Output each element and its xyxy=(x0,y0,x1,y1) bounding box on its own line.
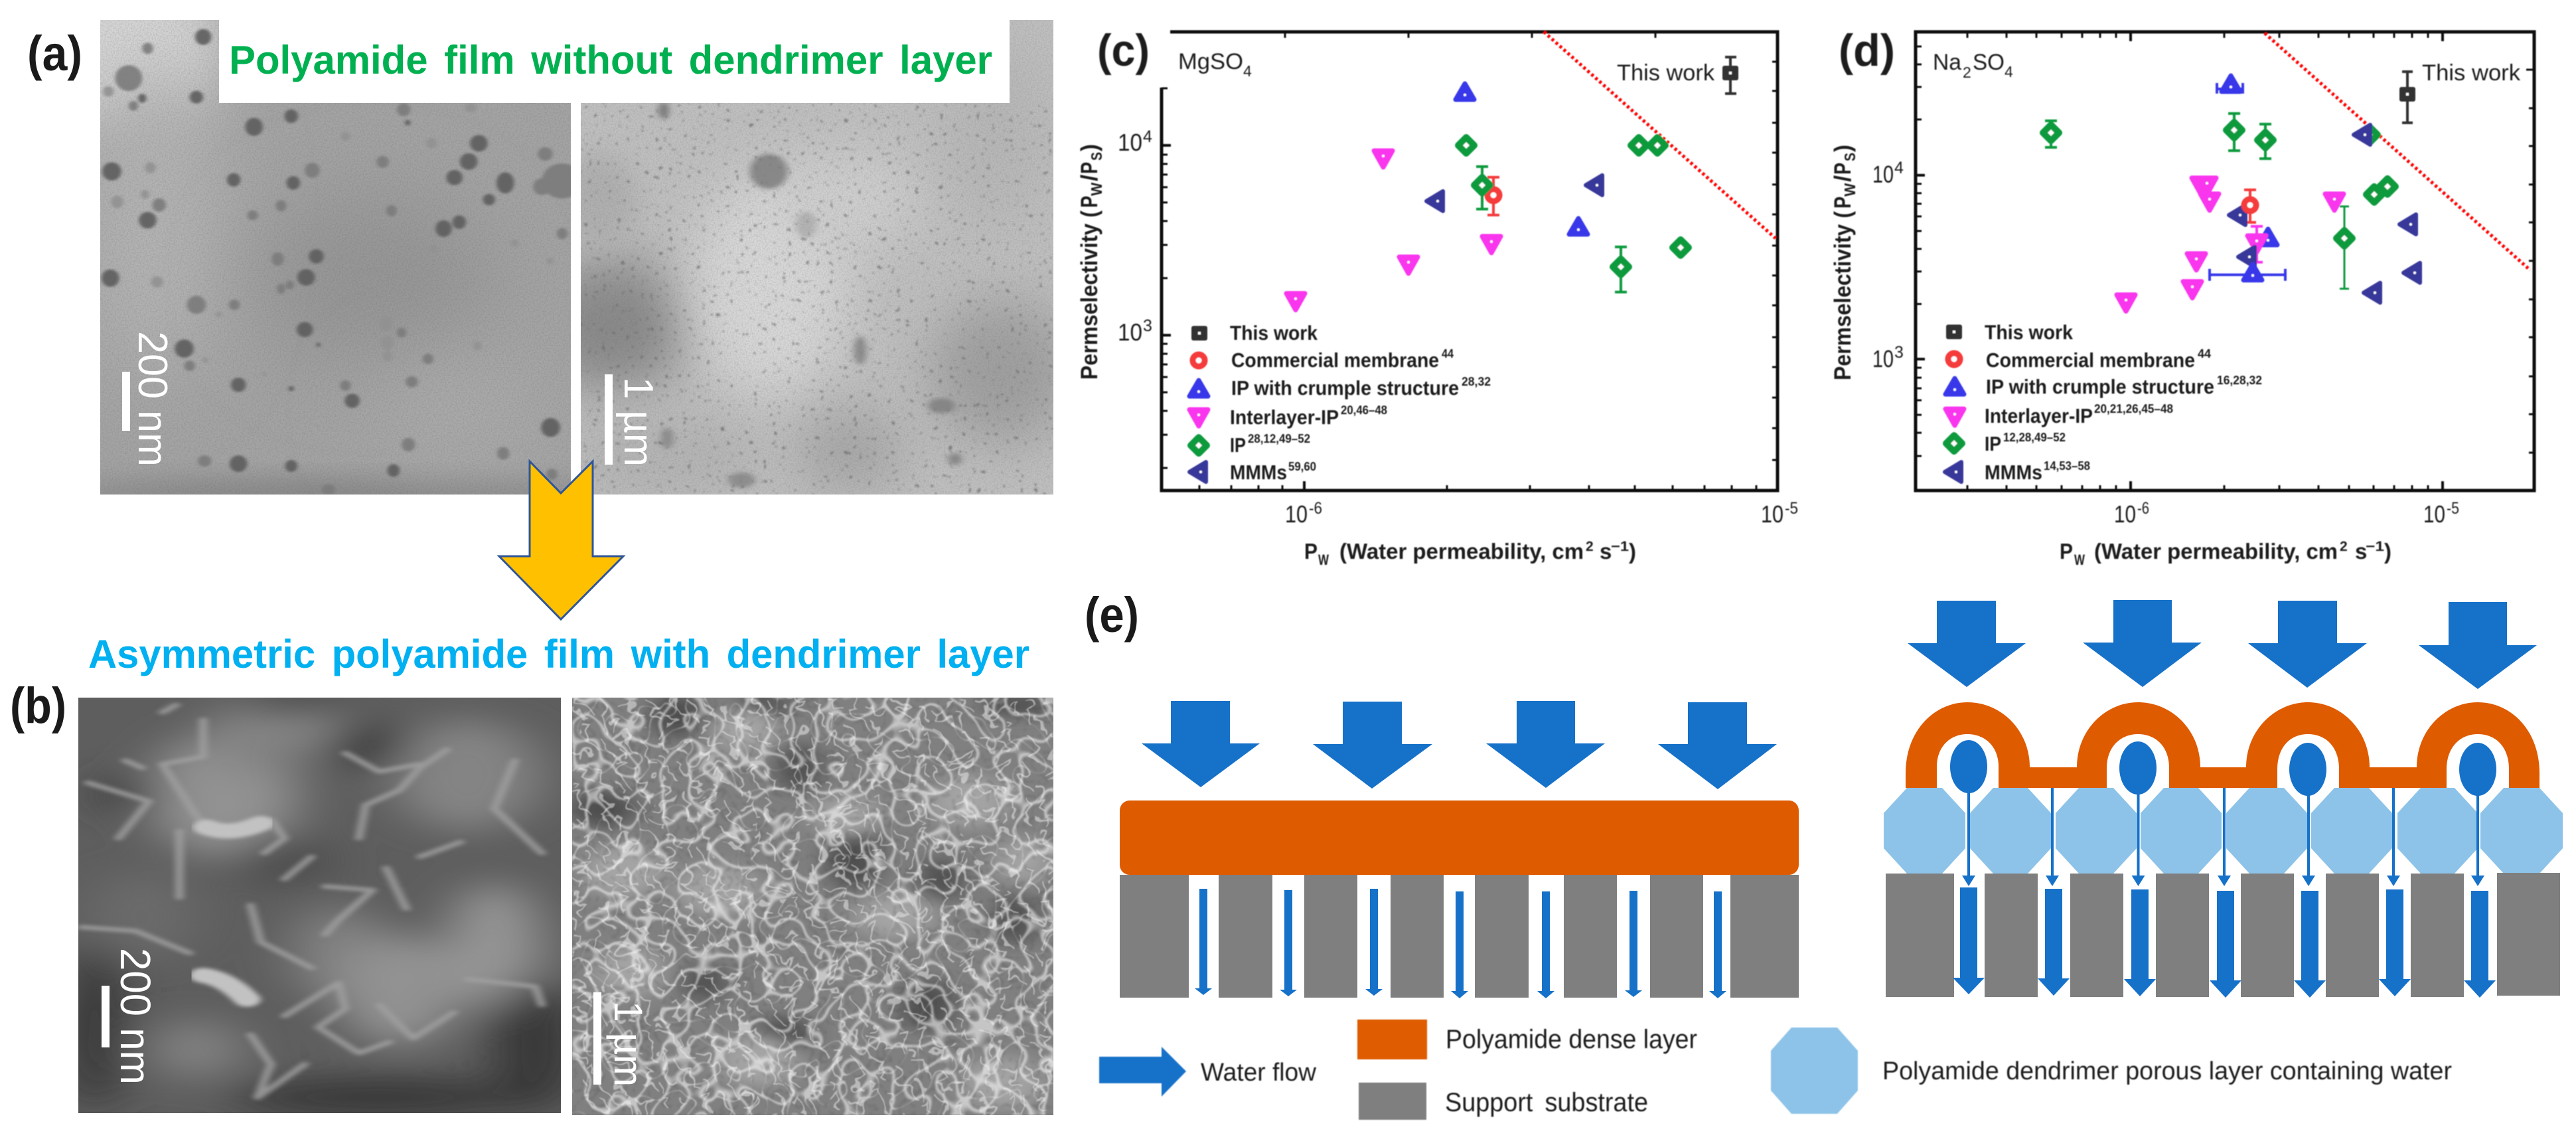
panel label (b): (b) xyxy=(10,678,66,734)
support substrate blocks xyxy=(1120,875,1799,998)
y-axis title d: P xyxy=(1830,163,1856,175)
x-axis tick labels c xyxy=(1285,499,1798,528)
salt label Na2SO4: Na xyxy=(1933,50,1961,75)
legend d: IP xyxy=(1985,432,2001,455)
dendrimer porous layer octagons xyxy=(1884,788,2563,874)
y-axis tick labels c: 10 xyxy=(1118,319,1142,346)
y-axis title d: ) xyxy=(1830,145,1856,152)
y-axis title d: P xyxy=(1830,196,1856,208)
legend item: support substrate: Support substrate xyxy=(1445,1088,1648,1117)
x-axis title c: ) xyxy=(1629,539,1636,564)
x-axis title d: 2 xyxy=(2340,539,2348,554)
water droplets under humps xyxy=(1950,740,2496,796)
panel c: MgSO4 chart xyxy=(1077,25,1798,568)
legend d xyxy=(1945,321,2262,484)
scale bar a right: 1 um: 1 µm xyxy=(615,377,661,467)
feed water arrows right xyxy=(1908,600,2537,689)
panel d: Na2SO4 chart xyxy=(1830,25,2534,568)
panel label (c): (c) xyxy=(1097,25,1150,76)
permeate arrows in pores xyxy=(1195,889,1726,998)
arrow: yellow transition arrow from a to b xyxy=(499,461,623,619)
y-axis title c: / xyxy=(1077,175,1102,181)
legend c: 44 xyxy=(1442,347,1454,360)
error bars d xyxy=(2045,72,2413,289)
panel b title: Asymmetric polyamide film with dendrimer layer xyxy=(88,632,1029,676)
panel label (d): (d) xyxy=(1839,25,1895,76)
legend d: This work xyxy=(1985,321,2074,344)
x-axis title c: s xyxy=(1600,539,1612,564)
scale bar b left: 200 nm: 200 nm xyxy=(112,948,159,1085)
legend c: 20,46–48 xyxy=(1341,404,1387,417)
legend e xyxy=(1099,1020,2452,1120)
legend c: 59,60 xyxy=(1288,460,1316,473)
y-axis tick labels d: 4 xyxy=(1894,159,1904,177)
legend item: polyamide dendrimer porous layer xyxy=(1771,1028,2452,1114)
y-axis title d: W xyxy=(1841,183,1858,196)
legend item: polyamide dense layer xyxy=(1357,1020,1697,1059)
y-axis title d: Permselectivity ( xyxy=(1830,211,1856,380)
x-axis title d: s xyxy=(2355,539,2367,564)
red dotted upper bound line d xyxy=(2265,33,2530,270)
y-axis title c: S xyxy=(1088,152,1105,161)
scale bar b right: 1 um xyxy=(593,992,650,1087)
salt label MgSO4: 4 xyxy=(1243,62,1252,80)
banner: polyamide film without dendrimer layer xyxy=(219,0,1010,495)
salt label Na2SO4: 2 xyxy=(1963,64,1971,81)
legend item: polyamide dense layer: Polyamide dense layer xyxy=(1446,1025,1697,1054)
x-axis tick labels d: -5 xyxy=(2447,499,2459,518)
data points d xyxy=(2043,76,2420,311)
y-axis tick labels c: 3 xyxy=(1143,317,1152,335)
y-axis tick labels d xyxy=(1872,159,1904,372)
x-axis tick labels d: 10 xyxy=(2423,500,2445,528)
y-axis tick labels c: 4 xyxy=(1143,127,1152,146)
salt label Na2SO4: 4 xyxy=(2005,63,2013,80)
x-axis title c: −1 xyxy=(1611,539,1629,554)
legend c: IP xyxy=(1230,433,1246,457)
x-axis title d: −1 xyxy=(2366,539,2384,554)
red dotted upper bound line c xyxy=(1544,32,1776,238)
x-axis tick labels d: -6 xyxy=(2137,499,2149,518)
legend d: 16,28,32 xyxy=(2217,374,2262,387)
y-axis title c: Permselectivity ( xyxy=(1077,210,1102,380)
polyamide crumpled dense layer xyxy=(1906,702,2539,788)
legend item: polyamide dendrimer porous layer: Polyamide dendrimer porous layer containing water xyxy=(1882,1057,2452,1085)
data points c xyxy=(1286,66,1738,310)
panel label (e): (e) xyxy=(1085,587,1139,643)
x-axis title d xyxy=(2060,539,2391,568)
y-axis tick labels d: 10 xyxy=(1872,161,1894,188)
salt label Na2SO4: SO xyxy=(1973,50,2005,75)
legend d: 12,28,49–52 xyxy=(2003,431,2066,444)
x-axis tick labels c: -6 xyxy=(1309,499,1322,518)
y-axis tick labels d: 3 xyxy=(1894,343,1904,362)
axes frame d xyxy=(1916,32,2534,491)
feed water arrows left xyxy=(1142,701,1777,789)
x-axis title c: 2 xyxy=(1586,539,1594,554)
panel label (a): (a) xyxy=(27,26,82,81)
legend item: support substrate xyxy=(1359,1083,1648,1120)
panel a: right TEM micrograph xyxy=(581,20,1053,495)
x-axis tick labels c: -5 xyxy=(1785,499,1798,518)
x-axis tick labels c: 10 xyxy=(1761,500,1783,528)
x-axis tick labels d: 10 xyxy=(2114,500,2136,528)
x-axis title d: (Water permeability, cm xyxy=(2094,539,2338,564)
thick permeate arrows right xyxy=(1953,887,2496,998)
error bars c xyxy=(1476,57,1736,292)
annotation this work c: This work xyxy=(1617,60,1715,86)
salt label Na2SO4 xyxy=(1933,50,2013,81)
legend d: Interlayer-IP xyxy=(1985,404,2093,427)
support substrate blocks right xyxy=(1886,873,2560,997)
panel e: membrane without dendrimer layer xyxy=(1120,701,1799,998)
x-axis title d: P xyxy=(2060,539,2073,564)
x-axis tick labels d xyxy=(2114,499,2459,528)
y-axis tick labels c: 10 xyxy=(1118,129,1142,156)
legend d: Commercial membrane xyxy=(1986,348,2195,372)
legend c: This work xyxy=(1230,321,1318,344)
legend d: IP with crumple structure xyxy=(1986,375,2214,398)
y-axis title c: ) xyxy=(1077,144,1102,151)
panel a: left TEM micrograph xyxy=(100,20,571,495)
legend d: 14,53–58 xyxy=(2044,459,2090,473)
legend d: 20,21,26,45–48 xyxy=(2094,402,2173,416)
legend c xyxy=(1189,321,1491,484)
y-axis title d: S xyxy=(1841,153,1858,161)
x-axis title c: W xyxy=(1318,552,1329,568)
y-axis title c: P xyxy=(1077,196,1102,208)
legend d: 44 xyxy=(2198,347,2211,360)
x-axis tick labels c: 10 xyxy=(1285,500,1308,528)
scale bar a left: 200 nm: 200 nm xyxy=(129,331,175,467)
y-axis title c: P xyxy=(1077,162,1102,174)
y-axis tick labels c xyxy=(1118,127,1152,346)
polyamide dense layer xyxy=(1120,801,1799,875)
salt label MgSO4: MgSO xyxy=(1178,49,1243,74)
annotation this work d: This work xyxy=(2422,60,2521,86)
legend d: MMMs xyxy=(1985,461,2042,484)
x-axis title c: (Water permeability, cm xyxy=(1339,539,1584,564)
legend c: IP with crumple structure xyxy=(1231,376,1459,400)
banner: polyamide film without dendrimer layer: Polyamide film without dendrimer layer xyxy=(229,38,992,82)
legend c: 28,32 xyxy=(1462,375,1491,388)
y-axis tick labels d: 10 xyxy=(1872,345,1894,372)
legend item: water flow: Water flow xyxy=(1201,1059,1317,1087)
y-axis title c: W xyxy=(1088,183,1105,196)
legend c: MMMs xyxy=(1230,461,1287,484)
legend item: water flow xyxy=(1099,1047,1317,1097)
x-axis title c xyxy=(1304,539,1636,568)
scale bar b right: 1 um: 1 µm xyxy=(606,1001,650,1087)
legend c: Commercial membrane xyxy=(1231,348,1439,372)
x-axis title d: ) xyxy=(2384,539,2391,564)
panel e: membrane with dendrimer layer xyxy=(1884,600,2563,998)
panel b: left SEM micrograph xyxy=(68,694,575,1116)
x-axis title d: W xyxy=(2074,552,2085,568)
y-axis title d: / xyxy=(1830,175,1856,182)
thin flow arrows through dendrimer layer xyxy=(1962,788,2484,886)
x-axis title c: P xyxy=(1304,539,1318,564)
legend c: 28,12,49–52 xyxy=(1248,432,1310,445)
legend c: Interlayer-IP xyxy=(1230,406,1339,429)
axes frame c xyxy=(1162,32,1778,491)
panel b: right SEM micrograph xyxy=(569,694,1053,1115)
